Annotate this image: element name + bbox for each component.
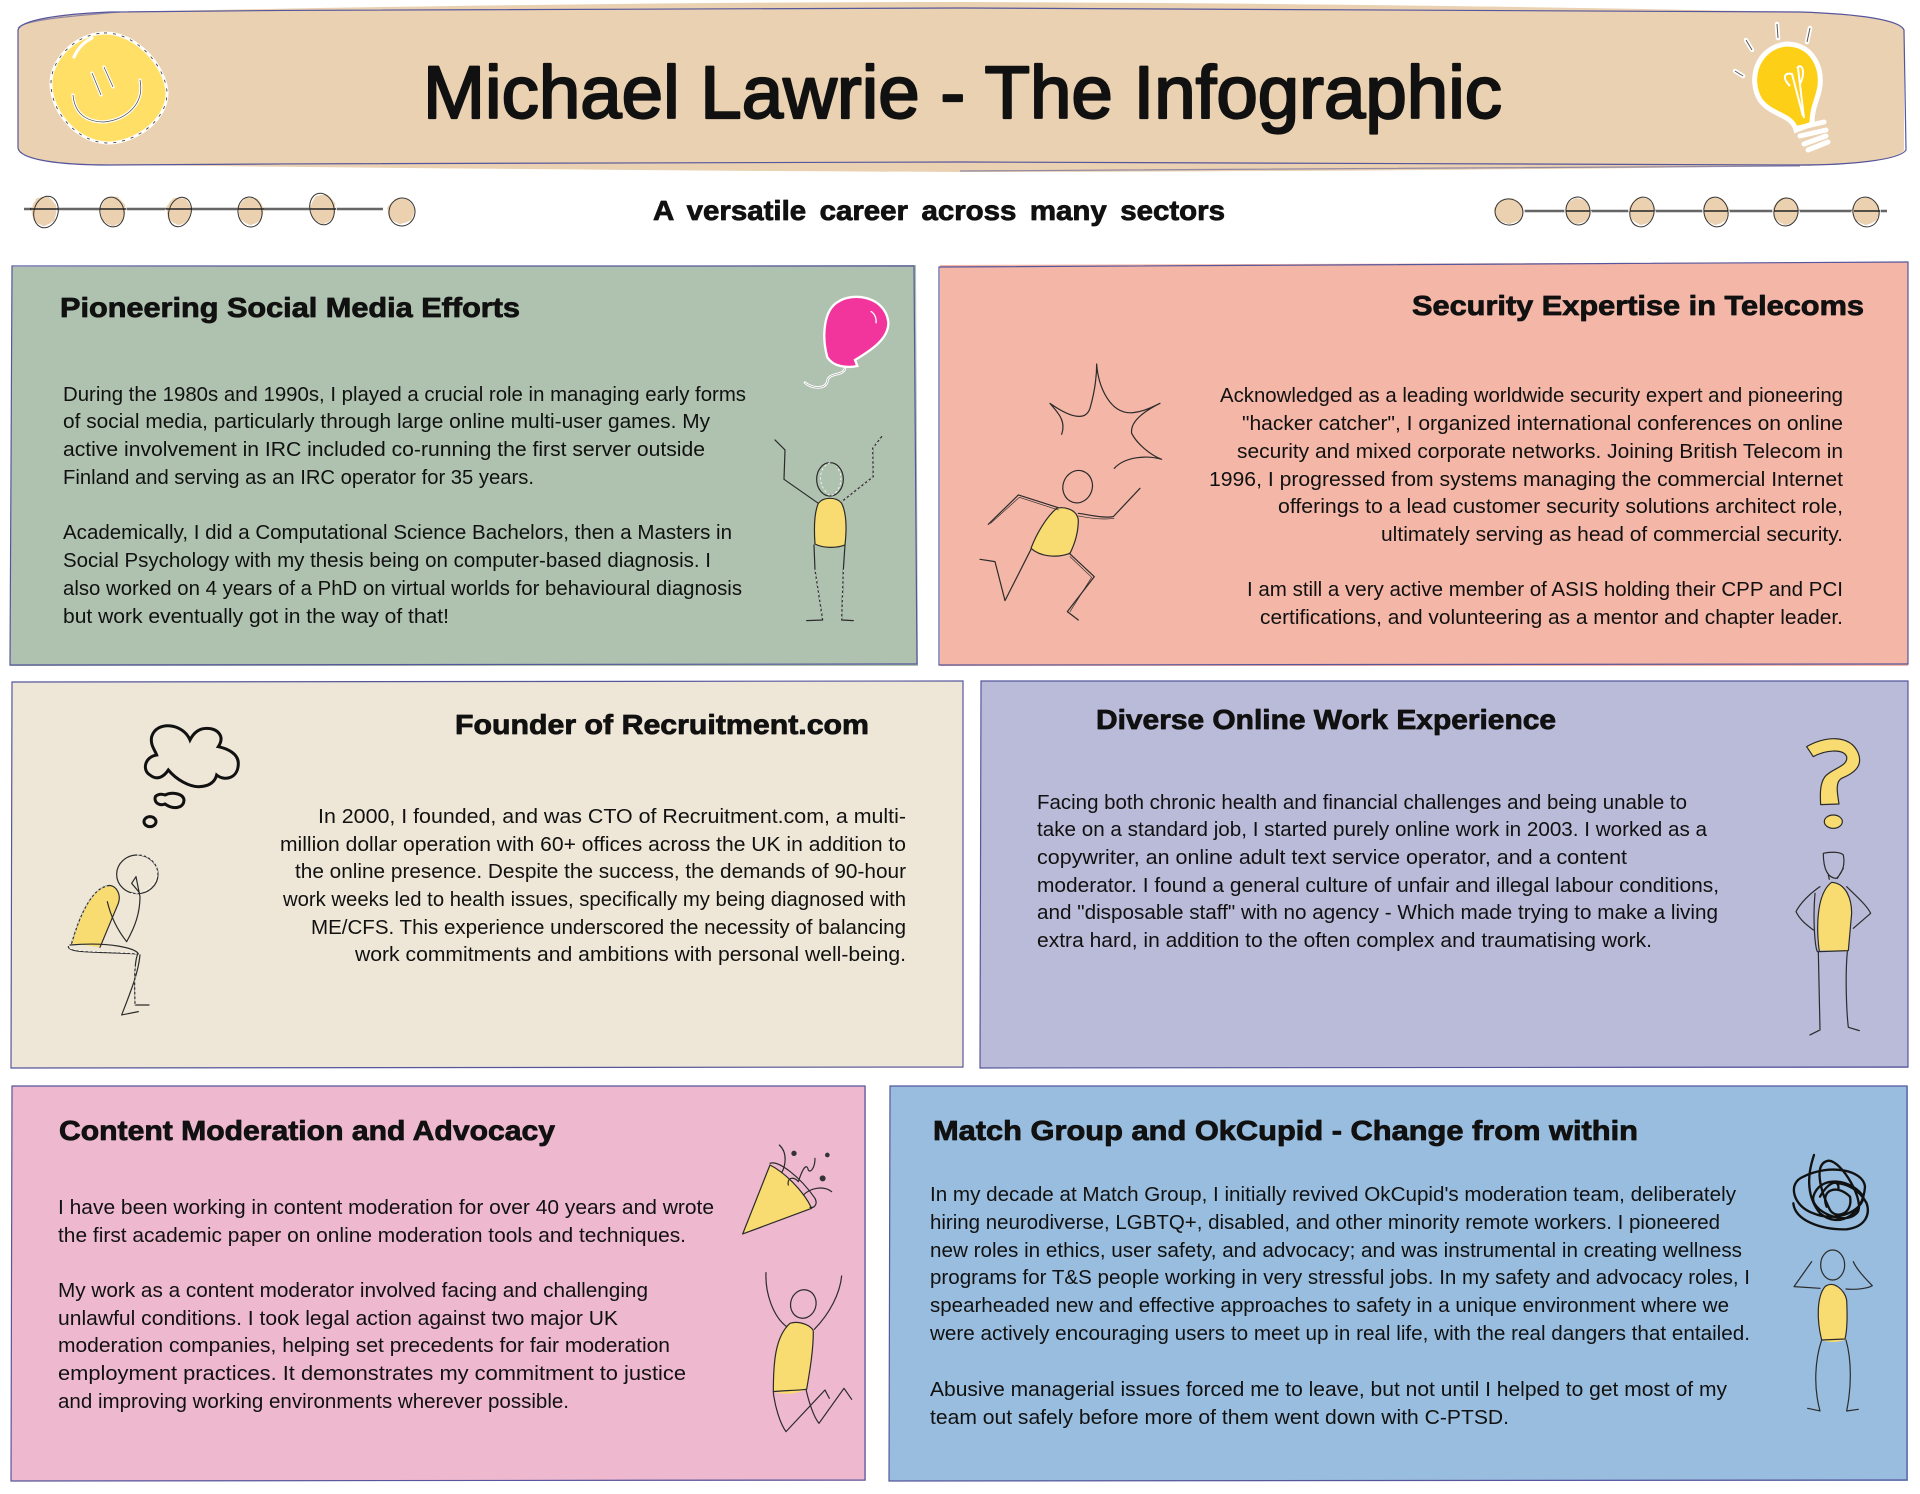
text block: hiring neurodiverse, LGBTQ+, disabled, and other minority remote workers. I pioneered [930, 1211, 1720, 1234]
text block: the first academic paper on online moderation tools and techniques. [58, 1224, 686, 1247]
heading: Content Moderation and Advocacy [59, 1115, 555, 1146]
text block: Social Psychology with my thesis being on computer-based diagnosis. I [63, 549, 711, 572]
icon: question mark [1807, 739, 1860, 828]
text block: Acknowledged as a leading worldwide security expert and pioneering [1220, 384, 1843, 407]
icon: smiley face [51, 33, 167, 143]
text block: were actively encouraging users to meet up in real life, with the real dangers that entailed. [929, 1322, 1750, 1345]
text block: ultimately serving as head of commercial security. [1381, 523, 1843, 546]
text block: but work eventually got in the way of that! [63, 605, 449, 628]
icon: light bulb [1735, 24, 1828, 150]
text block: and "disposable staff" with no agency - Which made trying to make a living [1037, 901, 1718, 924]
text block: 1996, I progressed from systems managing the commercial Internet [1209, 468, 1843, 491]
text block: spearheaded new and effective approaches to safety in a unique environment where we [930, 1294, 1729, 1317]
text block: work weeks led to health issues, specifically my being diagnosed with [282, 888, 906, 911]
icon: balloon [805, 297, 888, 387]
text block: Finland and serving as an IRC operator for 35 years. [63, 466, 534, 489]
text block: extra hard, in addition to the often complex and traumatising work. [1037, 929, 1652, 952]
text block: work commitments and ambitions with personal well-being. [354, 943, 906, 966]
subtitle: A versatile career across many sectors [653, 195, 1225, 226]
heading: Match Group and OkCupid - Change from within [933, 1115, 1638, 1146]
icon: thought cloud [144, 726, 238, 827]
panel: diverse online work [980, 681, 1908, 1068]
text block: moderator. I found a general culture of unfair and illegal labour conditions, [1037, 874, 1719, 897]
figure: seated thinking person [68, 855, 158, 1015]
text block [1209, 384, 1843, 629]
text block: of social media, particularly through large online multi-user games. My [63, 410, 711, 433]
text block [929, 1183, 1750, 1429]
text block [280, 805, 906, 966]
heading: Founder of Recruitment.com [455, 709, 869, 740]
icon: scribble [1793, 1155, 1868, 1229]
panel: founder of recruitment.com [11, 681, 963, 1068]
text block: During the 1980s and 1990s, I played a crucial role in managing early forms [63, 383, 746, 406]
text block: and improving working environments wherever possible. [58, 1390, 569, 1413]
text block: I have been working in content moderation for over 40 years and wrote [58, 1196, 714, 1219]
text block: unlawful conditions. I took legal action against two major UK [58, 1307, 618, 1330]
text block: In 2000, I founded, and was CTO of Recruitment.com, a multi- [318, 805, 906, 828]
heading: Pioneering Social Media Efforts [60, 292, 520, 323]
heading: Security Expertise in Telecoms [1412, 290, 1864, 321]
text block: take on a standard job, I started purely online work in 2003. I worked as a [1037, 818, 1708, 841]
text block: the online presence. Despite the success, the demands of 90-hour [295, 860, 906, 883]
figure: running person with burst [980, 364, 1162, 620]
panel: pioneering social media [10, 265, 918, 666]
text block: copywriter, an online adult text service operator, and a content [1037, 846, 1627, 869]
text block: Abusive managerial issues forced me to leave, but not until I helped to get most of my [930, 1378, 1728, 1401]
divider beads left [24, 190, 417, 231]
heading: Diverse Online Work Experience [1096, 704, 1556, 735]
title: Michael Lawrie - The Infographic [423, 51, 1502, 134]
figure: jumping person [766, 1273, 852, 1432]
header banner [18, 2, 1906, 172]
text block: certifications, and volunteering as a mentor and chapter leader. [1260, 606, 1843, 629]
text block: My work as a content moderator involved facing and challenging [58, 1279, 648, 1302]
text block: I am still a very active member of ASIS holding their CPP and PCI [1247, 578, 1843, 601]
text block: In my decade at Match Group, I initially revived OkCupid's moderation team, deliberately [930, 1183, 1737, 1206]
panel: security expertise [939, 262, 1908, 666]
text block: employment practices. It demonstrates my commitment to justice [58, 1362, 686, 1385]
text block: security and mixed corporate networks. Joining British Telecom in [1237, 440, 1843, 463]
text block: offerings to a lead customer security solutions architect role, [1278, 495, 1843, 518]
text block: moderation companies, helping set precedents for fair moderation [58, 1334, 670, 1357]
text block: million dollar operation with 60+ offices across the UK in addition to [280, 833, 906, 856]
text block: new roles in ethics, user safety, and advocacy; and was instrumental in creating wellness [930, 1239, 1742, 1262]
figure: person hands on hips [1796, 852, 1871, 1035]
panel: content moderation [11, 1086, 866, 1481]
panel: match group and okcupid [889, 1086, 1908, 1481]
text block: ME/CFS. This experience underscored the necessity of balancing [311, 916, 906, 939]
text block: active involvement in IRC included co-running the first server outside [63, 438, 705, 461]
figure: person hands on head [1794, 1250, 1872, 1411]
text block [1037, 791, 1719, 952]
text block: also worked on 4 years of a PhD on virtual worlds for behavioural diagnosis [63, 577, 742, 600]
text block [58, 1196, 714, 1413]
text block: Facing both chronic health and financial challenges and being unable to [1037, 791, 1687, 814]
text block: "hacker catcher", I organized international conferences on online [1242, 412, 1843, 435]
divider beads right [1492, 194, 1887, 230]
figure: person reaching up [775, 437, 882, 621]
text block: Academically, I did a Computational Science Bachelors, then a Masters in [63, 521, 732, 544]
text block: programs for T&S people working in very stressful jobs. In my safety and advocacy roles, I [930, 1266, 1750, 1289]
text block [63, 383, 746, 628]
text block: team out safely before more of them went down with C-PTSD. [930, 1406, 1509, 1429]
icon: party popper [743, 1145, 832, 1234]
